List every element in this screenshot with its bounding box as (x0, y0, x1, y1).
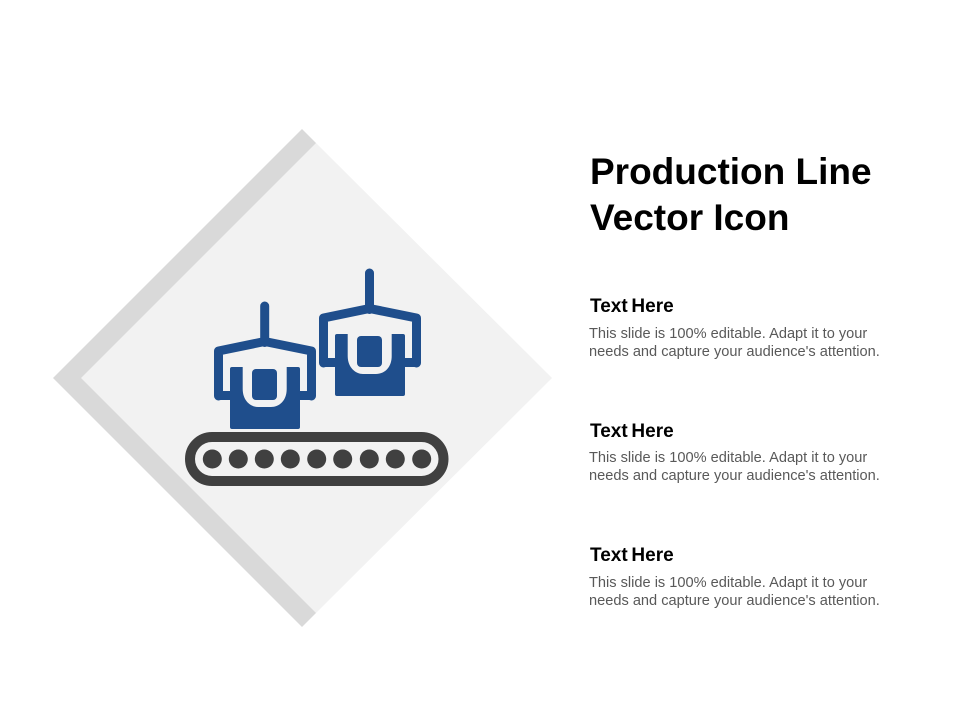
body text 3: needs and capture your audience's attention. (589, 593, 880, 609)
icon: conveyor belt (190, 437, 444, 481)
diamond: grey backing (53, 129, 316, 627)
title: Vector Icon (590, 197, 789, 238)
icon: right robotic gripper (324, 273, 416, 396)
body text 1: needs and capture your audience's attention. (589, 344, 880, 360)
body text 2: This slide is 100% editable. Adapt it to your (589, 450, 867, 466)
body text 1 (589, 326, 880, 360)
body text 3: This slide is 100% editable. Adapt it to your (589, 575, 867, 591)
diamond: light panel (81, 143, 552, 613)
body text 2 (589, 450, 880, 484)
body text 1: This slide is 100% editable. Adapt it to your (589, 326, 867, 342)
heading 3: Text Here (590, 545, 674, 566)
title (590, 151, 872, 238)
heading 2: Text Here (590, 421, 674, 442)
heading 1: Text Here (590, 296, 674, 317)
title: Production Line (590, 151, 872, 192)
body text 2: needs and capture your audience's attention. (589, 468, 880, 484)
body text 3 (589, 575, 880, 609)
icon: left robotic gripper (218, 306, 312, 429)
